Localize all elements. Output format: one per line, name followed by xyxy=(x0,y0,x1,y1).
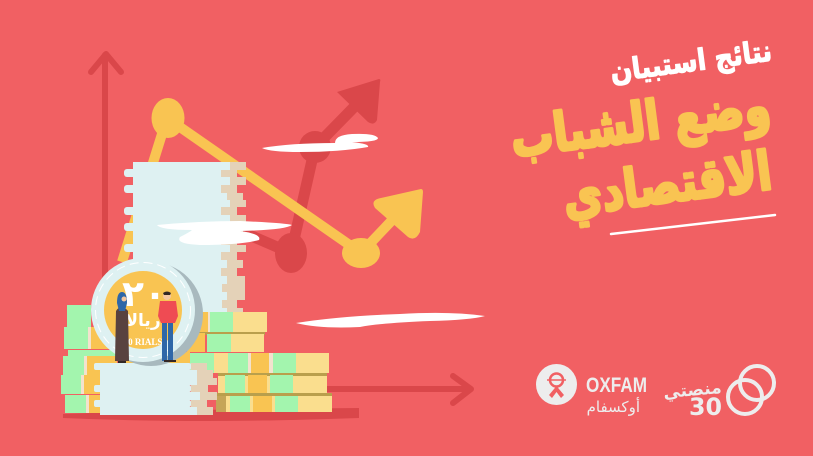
figure: man xyxy=(158,292,178,362)
coin: ريالا xyxy=(125,311,161,331)
lower right bills xyxy=(216,393,332,412)
coin: 20 RIALS xyxy=(124,337,162,347)
main title second line: الاقتصادي xyxy=(559,140,775,229)
yellow back panel xyxy=(120,352,190,363)
upper right bills xyxy=(185,312,267,352)
logo: oxfam: أوكسفام xyxy=(587,397,640,416)
coin xyxy=(91,258,203,366)
title block xyxy=(502,35,791,235)
left bills xyxy=(61,305,168,413)
logo: manassati 30: 30 xyxy=(689,393,722,421)
chart axes xyxy=(91,54,471,403)
middle right bills xyxy=(190,353,329,393)
logo: manassati 30 xyxy=(663,366,774,421)
money stacks xyxy=(61,305,332,413)
figure: woman xyxy=(115,292,129,363)
coin stack xyxy=(124,162,246,317)
main title: وضع الشباب xyxy=(507,75,774,170)
logo: oxfam xyxy=(536,364,647,416)
front coin stack xyxy=(94,363,217,415)
title underline xyxy=(611,215,775,234)
yellow trend line xyxy=(122,98,423,268)
dark trend line xyxy=(240,79,380,273)
logo: oxfam: OXFAM xyxy=(586,374,647,397)
coin value text: ٢٠ xyxy=(122,274,166,315)
clouds xyxy=(157,134,485,328)
subtitle: نتائج استبيان xyxy=(608,35,774,89)
logo: manassati 30: منصتي xyxy=(663,378,722,403)
ground shadow xyxy=(63,408,359,421)
